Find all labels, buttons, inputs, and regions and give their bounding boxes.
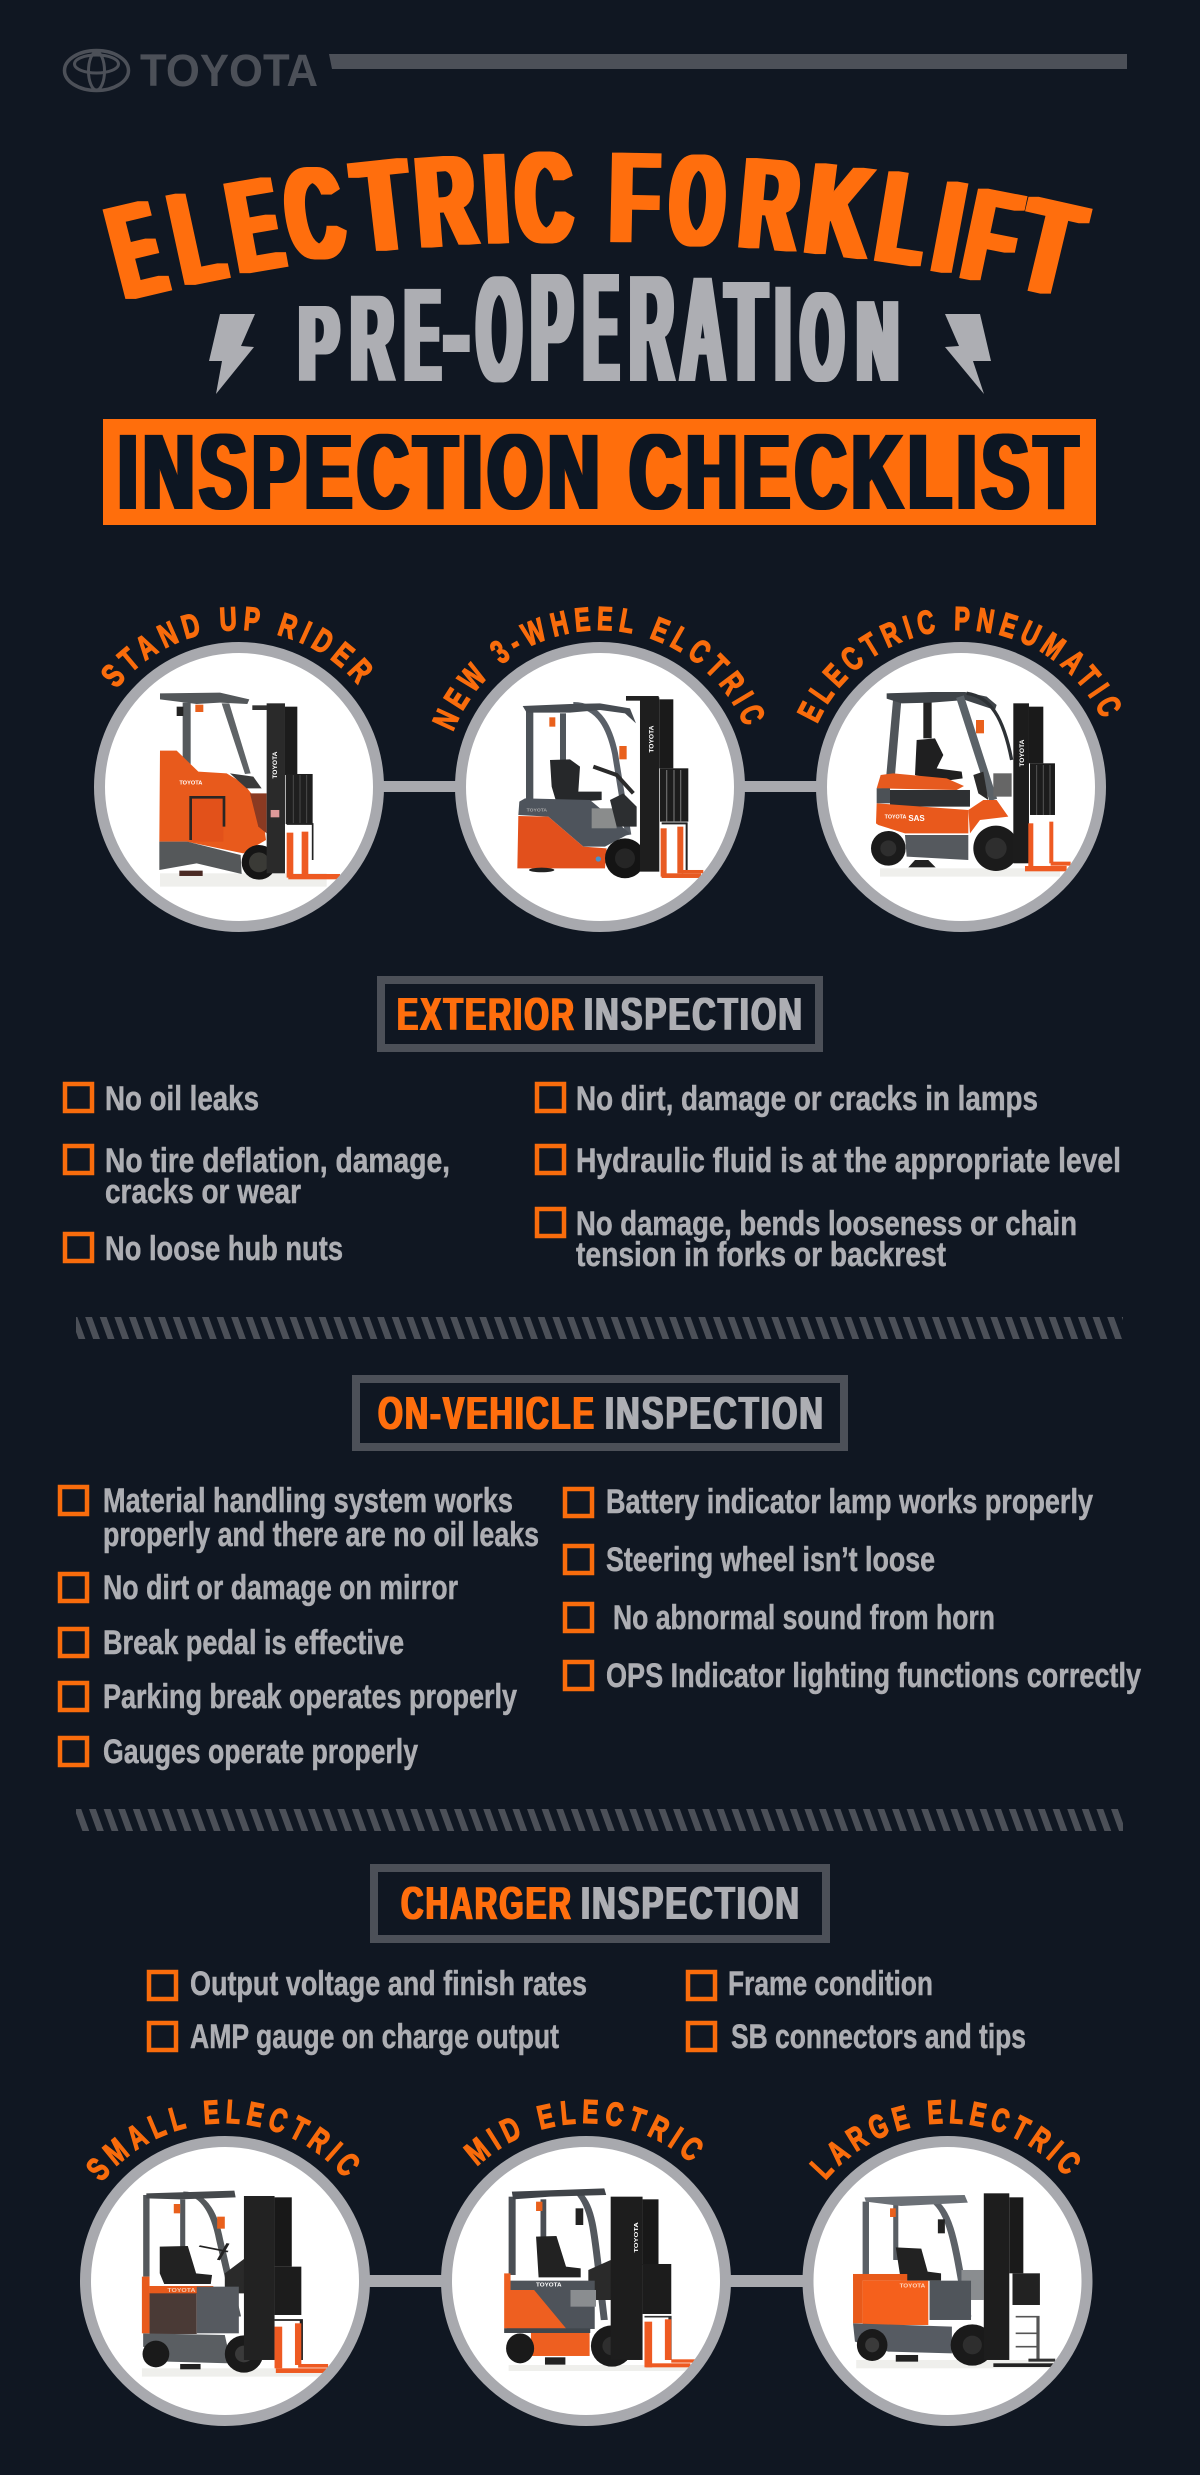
checklist: On-Vehicle: Parking break operates properly (103, 1678, 517, 1716)
title: Electric Forklift arched: R (735, 129, 804, 280)
title: Pre-Operation: N (857, 277, 898, 406)
checklist: Charger: SB connectors and tips (731, 2018, 1026, 2056)
title: Pre-Operation: - (444, 251, 469, 412)
section heading: Exterior Inspection: EXTERIOR (397, 988, 576, 1040)
checklist: Exterior: No damage, bends looseness or chain (576, 1205, 1077, 1243)
title: Pre-Operation (299, 240, 898, 415)
title: Electric Forklift arched: F (953, 161, 1031, 315)
section heading: Charger Inspection (374, 1868, 826, 1939)
section heading: Exterior Inspection: INSPECTION (584, 988, 804, 1040)
title: Electric Forklift arched: E (219, 149, 291, 302)
forklift circle: Electric Pneumatic: TOYOTA (885, 814, 907, 820)
forklift circle: Mid Electric: TOYOTA (634, 2222, 640, 2253)
forklift circle: Mid Electric (446, 2141, 726, 2421)
forklift circle: New 3-Wheel Electric: TOYOTA (527, 808, 547, 814)
title: Electric Forklift arched: K (799, 135, 879, 288)
forklift circle: Electric Pneumatic (821, 647, 1101, 927)
title: Electric Forklift arched: C (276, 137, 352, 290)
checklist: Charger: AMP gauge on charge output (190, 2018, 559, 2056)
header bar (329, 54, 1127, 69)
section heading: On-Vehicle Inspection: ON-VEHICLE (378, 1387, 596, 1439)
title: Electric Forklift arched: I (925, 153, 974, 302)
title: Electric Forklift arched: L (159, 159, 234, 314)
checklist: Charger: Output voltage and finish rates (190, 1965, 587, 2003)
title: Electric Forklift arched: E (96, 172, 177, 328)
checklist: On-Vehicle: Break pedal is effective (103, 1624, 404, 1662)
arched label: Stand Up Rider: STAND UP RIDER (102, 606, 372, 687)
forklift circle: Electric Pneumatic: TOYOTA (1019, 739, 1026, 767)
checklist: On-Vehicle: Gauges operate properly (103, 1733, 418, 1771)
section heading: On-Vehicle Inspection: INSPECTION (605, 1387, 825, 1439)
arched label: Electric Pneumatic: ELECTRIC PNEUMATIC (796, 606, 1121, 724)
forklift circle: Stand Up Rider: TOYOTA (272, 751, 279, 779)
arched label: Small Electric: SMALL ELECTRIC (86, 2099, 360, 2180)
forklift circle: New 3-Wheel Electric: TOYOTA (648, 725, 655, 753)
forklift circle: Stand Up Rider: TOYOTA (179, 781, 202, 787)
title: Pre-Operation: R (351, 271, 393, 408)
checklist: On-Vehicle: Material handling system works (103, 1482, 513, 1520)
checklist: Exterior: No oil leaks (105, 1080, 259, 1118)
title: Electric Forklift arched: I (482, 125, 511, 272)
checklist: Exterior: cracks or wear (105, 1173, 301, 1211)
arched label: Large Electric: LARGE ELECTRIC (808, 2100, 1080, 2180)
section heading: Charger Inspection: INSPECTION (581, 1877, 801, 1929)
logo: Toyota: TOYOTA (140, 45, 318, 96)
forklift circle: Electric Pneumatic: SAS (908, 814, 925, 823)
title: Electric Forklift arched (96, 124, 1096, 328)
forklift circle: Mid Electric: TOYOTA (536, 2282, 562, 2288)
checklist: Exterior: tension in forks or backrest (576, 1236, 946, 1274)
logo: Toyota (64, 45, 318, 96)
title: Electric Forklift arched: R (412, 126, 480, 276)
title: Pre-Operation: P (531, 242, 572, 415)
connector: top row (380, 781, 820, 792)
forklift circle: New 3-Wheel Electric (460, 647, 740, 927)
section heading: On-Vehicle Inspection (356, 1379, 844, 1447)
forklift circle: Small Electric: TOYOTA (167, 2287, 196, 2293)
title: Pre-Operation: O (477, 246, 521, 414)
forklift circle: Large Electric: TOYOTA (900, 2283, 925, 2289)
title: Pre-Operation: P (299, 283, 339, 405)
title: Electric Forklift arched: C (514, 124, 573, 271)
checklist: Exterior: No loose hub nuts (105, 1230, 343, 1268)
checklist: On-Vehicle: No abnormal sound from horn (613, 1599, 995, 1637)
connector: bottom row (365, 2275, 807, 2287)
arched label: New 3-Wheel Elctric: NEW 3-WHEEL ELCTRIC (432, 606, 764, 732)
checklist: Exterior: No dirt, damage or cracks in lamps (576, 1080, 1038, 1118)
icon: left lightning bolt (209, 314, 255, 394)
icon: right lightning bolt (945, 314, 991, 394)
title: Electric Forklift arched: T (348, 131, 417, 281)
title: Electric Forklift arched: T (1004, 168, 1096, 327)
checklist: On-Vehicle: Steering wheel isn’t loose (606, 1541, 935, 1579)
section heading: Exterior Inspection (381, 980, 819, 1048)
title: Pre-Operation: A (681, 247, 724, 414)
title: Pre-Operation: I (776, 257, 790, 410)
title: Pre-Operation: R (630, 243, 673, 414)
checklist: On-Vehicle (60, 1482, 1141, 1771)
title: Electric Forklift arched: L (869, 143, 937, 295)
forklift circle: Small Electric (85, 2141, 365, 2421)
forklift circle: Large Electric (808, 2141, 1088, 2421)
title: Pre-Operation: T (726, 251, 766, 412)
checklist: Exterior: No tire deflation, damage, (105, 1142, 450, 1180)
checklist: Charger (149, 1965, 1026, 2056)
title: Electric Forklift arched: O (668, 126, 727, 274)
title: Pre-Operation: E (405, 260, 440, 410)
title: Pre-Operation: E (584, 240, 618, 415)
checklist: Exterior (65, 1080, 1121, 1274)
checklist: On-Vehicle: properly and there are no oil leaks (103, 1516, 539, 1554)
title: Electric Forklift arched: F (609, 124, 660, 271)
checklist: Charger: Frame condition (728, 1965, 933, 2003)
checklist: On-Vehicle: No dirt or damage on mirror (103, 1569, 458, 1607)
section heading: Charger Inspection: CHARGER (401, 1877, 573, 1929)
checklist: On-Vehicle: Battery indicator lamp works properly (606, 1483, 1093, 1521)
arched label: Mid Electric: MID ELECTRIC (462, 2099, 703, 2166)
title: Pre-Operation: O (801, 267, 843, 408)
forklift circle: Stand Up Rider (99, 647, 379, 927)
